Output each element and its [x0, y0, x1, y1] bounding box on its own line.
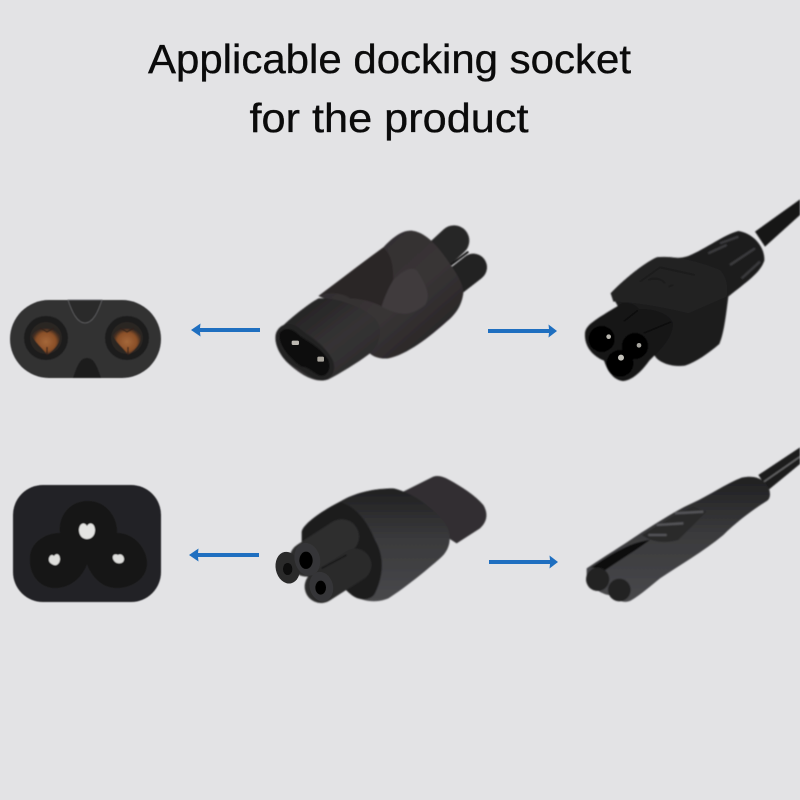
cable: [755, 199, 800, 247]
cable highlight: [764, 457, 800, 482]
right contact: [105, 316, 149, 360]
plug barrel: [587, 477, 770, 602]
front collar: [302, 502, 382, 599]
body facet light: [382, 269, 428, 314]
top notch: [68, 300, 102, 323]
adapter main body: [318, 231, 463, 359]
clover recess: [588, 326, 648, 377]
plug: C5 clover cord end: [585, 199, 800, 381]
body top facet: [611, 257, 727, 313]
adapter band: [320, 488, 450, 601]
bottom notch: [73, 358, 101, 378]
right pin: [113, 554, 124, 563]
arrow: top left: [191, 324, 260, 336]
clover silhouette: [585, 302, 673, 381]
embossed marking strokes: [648, 512, 703, 535]
cable: [758, 447, 800, 490]
C8 plug barrel: [276, 298, 380, 380]
title: [148, 36, 632, 141]
embossed mark: [640, 267, 695, 287]
title: for the product: [250, 95, 529, 141]
C7 rear barrel: [403, 476, 486, 543]
clover tubes: [307, 537, 355, 587]
plug pins: [292, 341, 324, 362]
socket: two-pin figure-8 face with copper contacts: [10, 300, 161, 378]
rear clover lobes: [437, 241, 473, 282]
top pin: [79, 523, 95, 539]
clover barrel divider: [623, 310, 672, 333]
socket: three-pin C6 face: [13, 485, 161, 602]
C8 plug recess: [279, 329, 329, 376]
adapter: C5 clover to C7 socket: [273, 476, 486, 604]
lobe gap: [451, 252, 468, 265]
arrow: top right: [488, 324, 557, 338]
strain relief ribs: [708, 237, 760, 278]
arrow: bottom left: [189, 548, 259, 562]
arrow: bottom right: [489, 556, 558, 568]
top groove: [590, 540, 650, 572]
plug body with strain relief: [611, 231, 764, 366]
body facet dark: [320, 247, 393, 307]
title: Applicable docking socket: [148, 36, 632, 82]
figure-8 face: [586, 568, 631, 601]
clover recess: [30, 501, 147, 588]
socket tube ends: [273, 540, 336, 604]
plug: C7 figure-8 cord end: [586, 447, 800, 602]
embossed markings: [642, 507, 707, 542]
C8 plug face rim: [275, 324, 334, 380]
tube divider: [322, 555, 347, 568]
clover pins: [606, 334, 641, 361]
adapter: C8 plug to C5 clover: [275, 231, 473, 380]
left pin: [49, 554, 60, 565]
left contact: [24, 316, 68, 360]
